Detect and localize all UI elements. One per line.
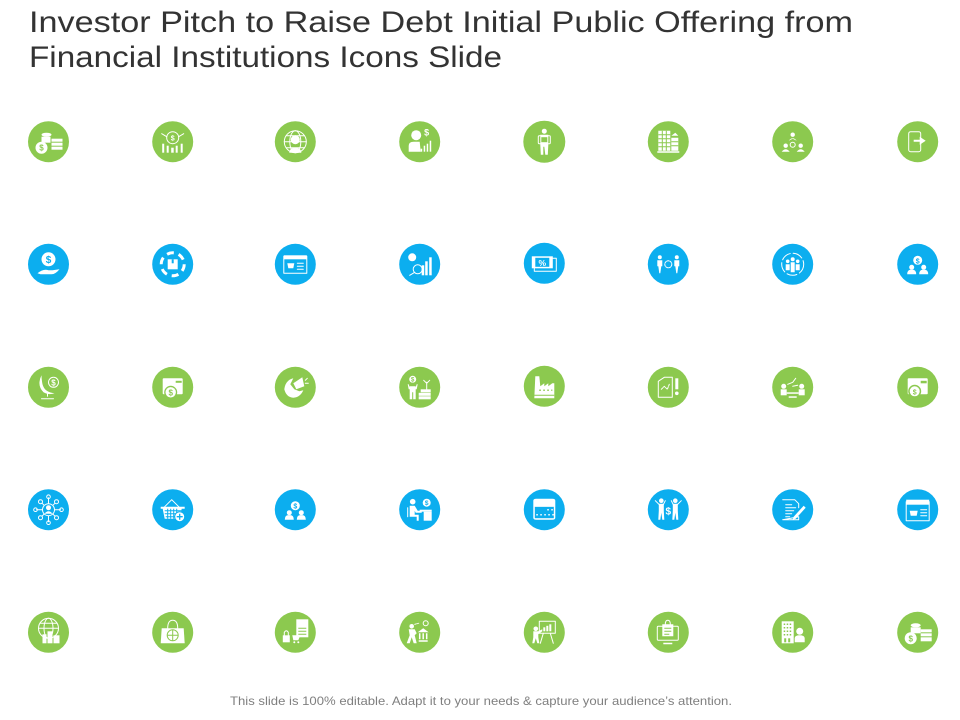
icon: person at desk dollar: $ bbox=[425, 500, 429, 507]
icon: phone arrow bbox=[897, 121, 938, 162]
icon: two people with dollar bbox=[275, 489, 316, 530]
icon: team in ring bbox=[772, 244, 813, 285]
icon: office buildings bbox=[648, 121, 689, 162]
icon: two people with dollar bbox=[897, 244, 938, 285]
title: Investor Pitch to Raise Debt Initial Public Offering from bbox=[29, 6, 853, 39]
icon: wallet coin bbox=[152, 367, 193, 408]
icon: search person with bars bbox=[399, 244, 440, 285]
icon: people strategy table bbox=[772, 367, 813, 408]
icon: two people with dollar: $ bbox=[916, 258, 920, 265]
icon: box with cycle arrows bbox=[152, 244, 193, 285]
icon: browser basket bbox=[275, 244, 316, 285]
icon: person at desk dollar bbox=[399, 489, 440, 530]
icon: wallet coin: $ bbox=[168, 388, 173, 397]
footer note: This slide is 100% editable. Adapt it to your needs & capture your audience’s attention. bbox=[230, 694, 732, 708]
title bbox=[29, 6, 853, 74]
icon: two people exchange bbox=[648, 244, 689, 285]
icon: basket add bbox=[152, 489, 193, 530]
icon: hand with coin: $ bbox=[46, 255, 52, 266]
icon: coins: $ bbox=[39, 144, 44, 153]
icon: two people with dollar: $ bbox=[293, 504, 297, 511]
icon: globe with bars bbox=[28, 612, 69, 653]
icon: coins bbox=[28, 121, 69, 162]
icon: percent banknotes bbox=[524, 243, 565, 284]
icon: two people lifting dollar bbox=[648, 489, 689, 530]
icon: two people lifting dollar: $ bbox=[666, 507, 672, 518]
icon: desk globe dollar: $ bbox=[51, 378, 56, 387]
icon: dollar clock over bars bbox=[152, 121, 193, 162]
icon: shopping bag globe bbox=[152, 612, 193, 653]
icon: receipt lock cart bbox=[275, 612, 316, 653]
icon: globe megaphone bbox=[275, 367, 316, 408]
icon: monitor with shopping bag bbox=[648, 612, 689, 653]
icon: investor plant coins: $ bbox=[411, 378, 415, 384]
icon: browser basket bbox=[897, 489, 938, 530]
icon: globe person bbox=[275, 121, 316, 162]
icon: investor plant coins bbox=[399, 367, 440, 408]
icon: coins: $ bbox=[908, 634, 913, 643]
icon: hand with coin bbox=[28, 244, 69, 285]
icon: person hub network bbox=[28, 489, 69, 530]
icon: calendar bbox=[524, 489, 565, 530]
icon: document with pen bbox=[772, 489, 813, 530]
icon: strategy document alert bbox=[648, 367, 689, 408]
icon: wallet coin: $ bbox=[913, 389, 917, 396]
icon: person holding board bbox=[523, 121, 565, 163]
icon: coins bbox=[897, 612, 938, 653]
icon: presenter with chart bbox=[524, 612, 565, 653]
icon: people network gear bbox=[772, 121, 813, 162]
icon: investor with chart: $ bbox=[424, 128, 429, 138]
icon: desk globe dollar bbox=[28, 367, 69, 408]
icon: factory bbox=[524, 366, 565, 407]
icon: person walking to bank bbox=[399, 612, 440, 653]
icon: investor with chart bbox=[399, 121, 440, 162]
icon: percent banknotes: % bbox=[539, 258, 547, 268]
icon: dollar clock over bars: $ bbox=[171, 136, 175, 143]
icon: wallet coin bbox=[897, 367, 938, 408]
icon: building and person bbox=[772, 612, 813, 653]
title: Financial Institutions Icons Slide bbox=[29, 41, 502, 74]
